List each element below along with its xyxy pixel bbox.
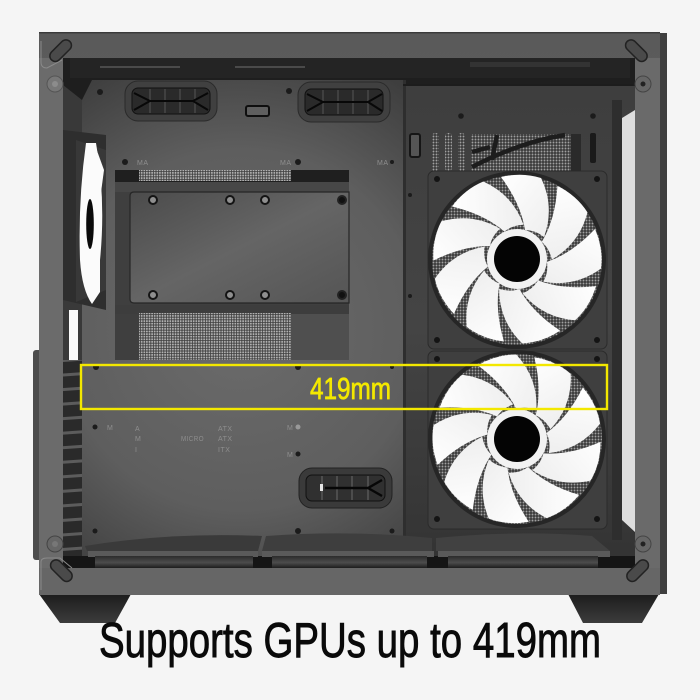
- motherboard form factor labels: MICRO: [181, 436, 204, 443]
- corner bracket: bottom left: [41, 536, 74, 590]
- motherboard cutout: [115, 170, 349, 360]
- motherboard form factor labels: M: [287, 425, 293, 432]
- bottom fan row: [63, 533, 635, 570]
- left fan seen edge-on: [63, 130, 106, 360]
- bottom case bar: [39, 568, 660, 595]
- frame screws: [434, 176, 600, 343]
- corner bracket: top right: [623, 38, 651, 92]
- standoff holes: [92, 88, 596, 534]
- small tie slot: [246, 106, 269, 116]
- fan blades: [428, 174, 606, 349]
- frame screws: [434, 356, 600, 522]
- clearance label: 419mm: [310, 371, 391, 406]
- motherboard form factor labels: MA: [377, 160, 388, 167]
- fan frame: [428, 171, 607, 349]
- cutout mesh: top stripe: [139, 170, 291, 181]
- main backplate: [82, 80, 403, 560]
- left vent strip: [63, 360, 82, 565]
- motherboard form factor labels: ATX: [218, 426, 233, 433]
- top fan: [428, 171, 607, 349]
- feet: [39, 594, 659, 623]
- cutout mesh: lower block: [139, 313, 291, 360]
- cable grommet: top right: [298, 82, 390, 122]
- motherboard form factor labels: MA: [137, 160, 148, 167]
- motherboard form factor labels: A: [135, 426, 140, 433]
- motherboard form factor labels: M: [287, 452, 293, 459]
- motherboard form factor labels: I: [135, 447, 137, 454]
- fan ring and mesh: [428, 171, 606, 349]
- cable grommet: bottom: [299, 468, 392, 508]
- fan blades: [407, 332, 628, 551]
- GPU clearance highlight box: [81, 365, 607, 409]
- fan hub: [487, 229, 547, 289]
- rear cable mesh with cables: [410, 133, 596, 171]
- motherboard form factor labels: M: [107, 425, 113, 432]
- top mesh ventilation: [70, 58, 630, 78]
- cable grommet: top left: [125, 81, 217, 121]
- bottom fan: [407, 332, 628, 551]
- motherboard form factor labels: M: [135, 436, 141, 443]
- motherboard form factor labels: ATX: [218, 436, 233, 443]
- fan frame: [428, 351, 607, 529]
- right glass strip: [622, 110, 635, 532]
- right side panel edge: [659, 33, 667, 594]
- motherboard form factor labels: MA: [280, 160, 292, 167]
- cooler mounting plate: [130, 192, 349, 303]
- motherboard form factor labels: [107, 160, 388, 459]
- interior shadow: [63, 58, 635, 568]
- case frame: [39, 32, 660, 595]
- left inner wall: [63, 85, 82, 360]
- motherboard form factor labels: ITX: [218, 447, 230, 454]
- fan ring and mesh: [428, 350, 606, 528]
- plate screws: [149, 196, 346, 299]
- left side bulge of case: [33, 350, 43, 560]
- corner bracket: bottom right: [625, 536, 651, 584]
- corner bracket: top left: [41, 38, 74, 92]
- right compartment panel: [403, 80, 635, 566]
- fan hub: [487, 409, 547, 469]
